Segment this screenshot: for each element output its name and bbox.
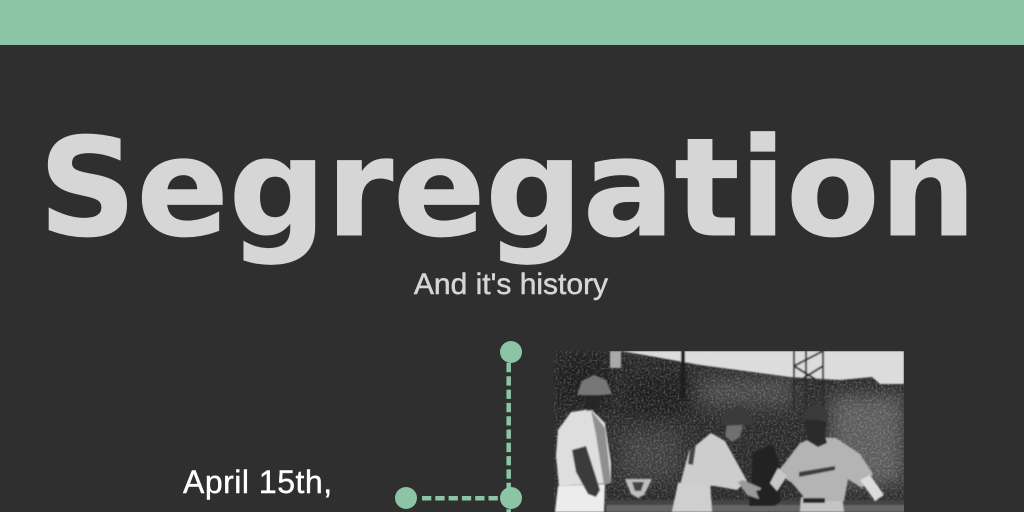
date label: April 15th, bbox=[183, 464, 333, 500]
subtitle: And it's history bbox=[414, 268, 608, 301]
top banner bbox=[0, 0, 1024, 45]
right player bbox=[770, 404, 884, 512]
middle player bbox=[672, 406, 781, 512]
title: Segregation bbox=[39, 110, 976, 268]
photo: baseball players shaking hands in front of a crowd bbox=[554, 351, 904, 512]
catcher bbox=[555, 375, 612, 512]
timeline connector bbox=[395, 341, 522, 512]
